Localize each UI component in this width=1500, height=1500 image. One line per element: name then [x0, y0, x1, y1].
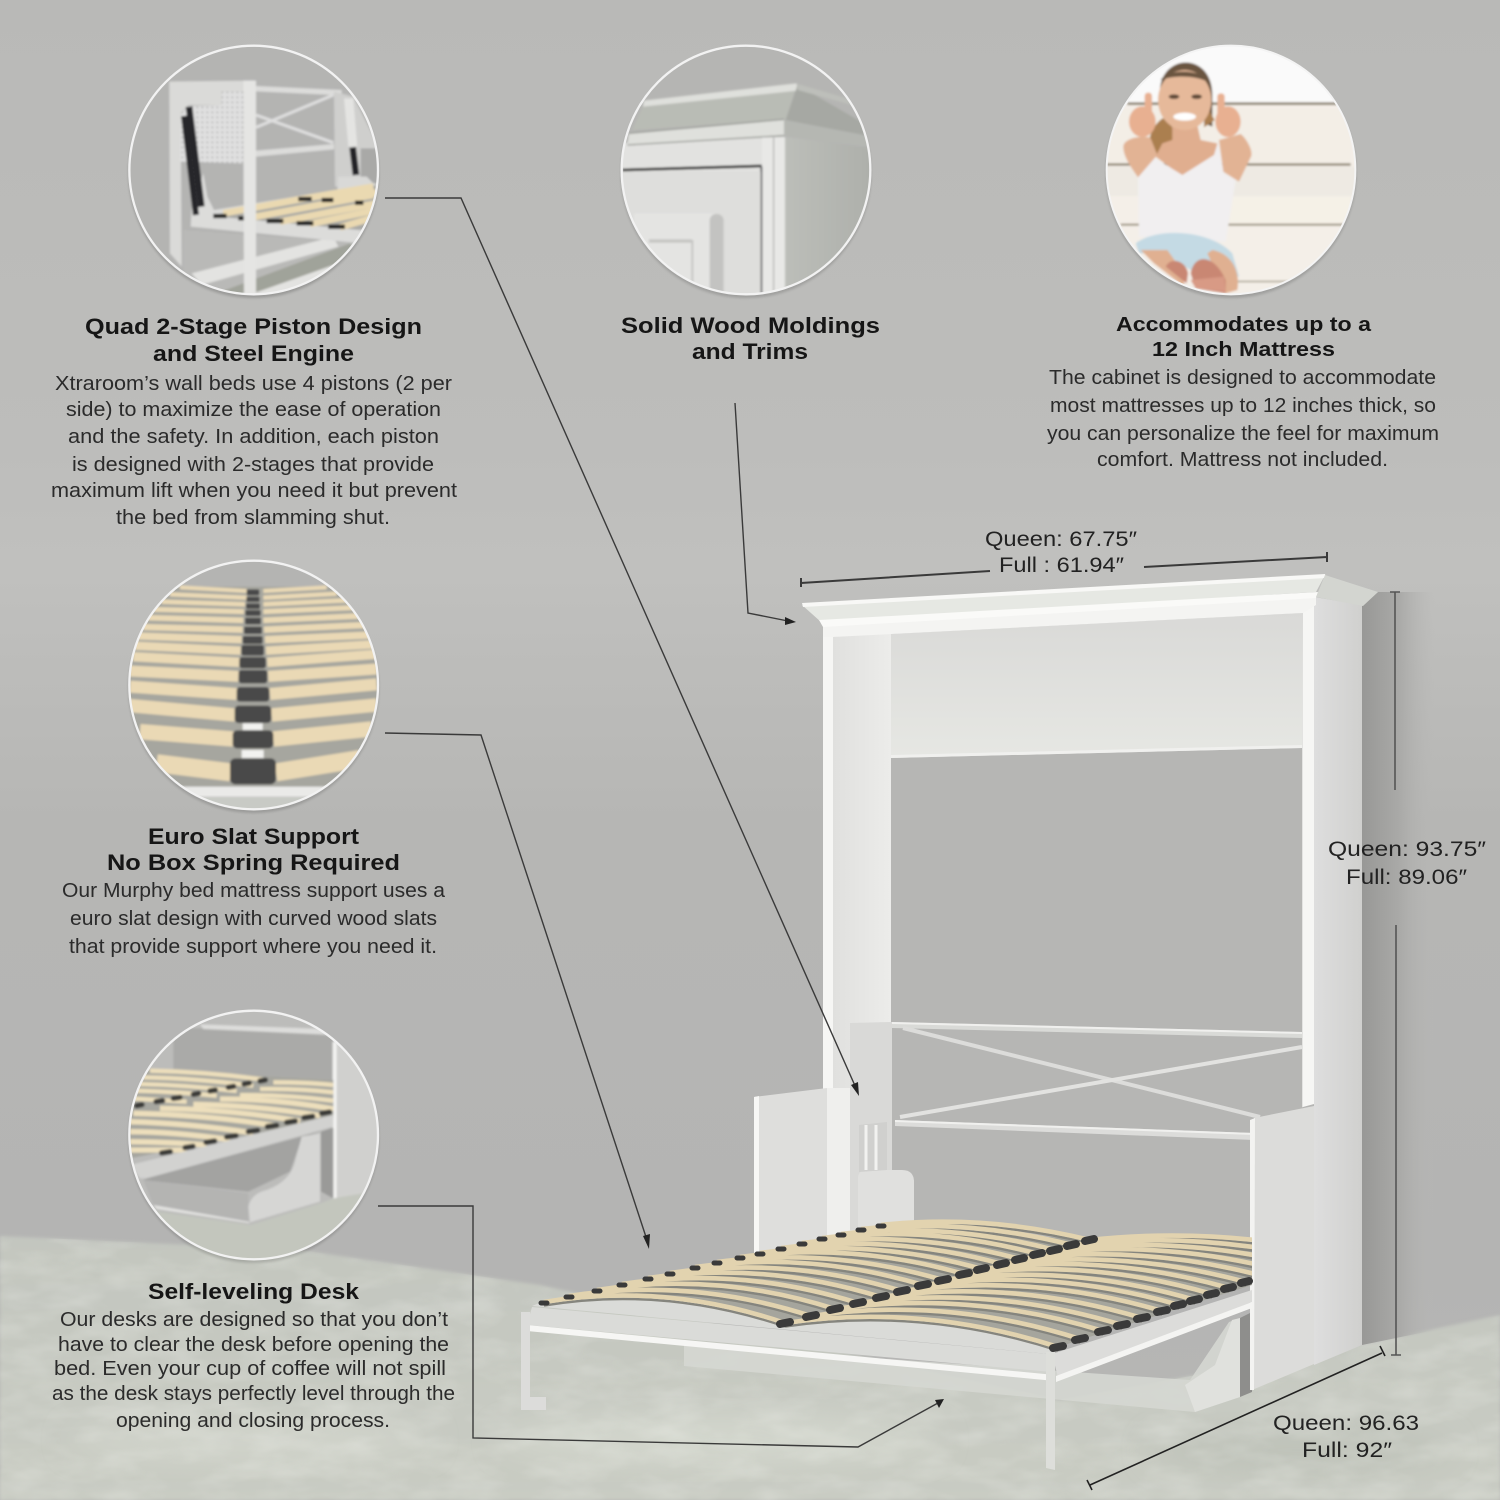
left wing panel [754, 1088, 850, 1255]
heading: mattress [1116, 314, 1372, 361]
text: desk description: Our desks are designed so that you don’t [60, 1308, 448, 1331]
dimension line: width [801, 552, 1327, 587]
text: piston description: and the safety. In addition, each piston [68, 425, 439, 448]
text: mattress description: you can personalize the feel for maximum [1047, 422, 1439, 445]
circle: self-leveling desk [128, 1010, 380, 1264]
leader: euro slat callout arrow [385, 733, 650, 1249]
heading: piston design: and Steel Engine [153, 341, 354, 366]
text: desk description: opening and closing process. [116, 1409, 390, 1432]
text: desk description: bed. Even your cup of coffee will not spill [54, 1357, 446, 1380]
desk under bed [684, 1312, 1252, 1412]
dimension label: width [985, 528, 1138, 577]
text: mattress description: comfort. Mattress not included. [1097, 448, 1388, 471]
text: mattress description [1047, 366, 1439, 471]
cabinet wall shadow [1362, 592, 1435, 1345]
text: desk description: have to clear the desk before opening the [58, 1333, 449, 1356]
heading: mattress: 12 Inch Mattress [1152, 339, 1335, 361]
heading: moldings: Solid Wood Moldings [621, 313, 880, 338]
text: piston description: the bed from slamming shut. [116, 506, 390, 529]
circle: woman with mattress [1105, 44, 1357, 298]
heading: desk: Self-leveling Desk [148, 1279, 360, 1304]
heading: piston design: Quad 2-Stage Piston Design [85, 314, 422, 339]
dimension label: depth: Queen: 96.63 [1273, 1412, 1419, 1435]
euro slats [544, 1222, 1331, 1350]
heading: moldings [621, 313, 880, 364]
text: desk description: as the desk stays perfectly level through the [52, 1382, 455, 1405]
circle: piston mechanism [128, 44, 380, 299]
leader: desk callout arrow [378, 1206, 944, 1447]
heading: mattress: Accommodates up to a [1116, 314, 1372, 336]
heading: piston design [85, 314, 422, 366]
dimension label: depth [1273, 1412, 1419, 1462]
murphy bed illustration [521, 574, 1378, 1470]
circle: euro slats [128, 560, 380, 814]
circle: crown molding [620, 44, 872, 298]
text: piston description: Xtraroom’s wall beds use 4 pistons (2 per [55, 372, 452, 395]
text: euro slat description: Our Murphy bed mattress support uses a [62, 879, 446, 902]
headboard frame with cross braces [850, 1022, 1302, 1230]
text: piston description [51, 372, 457, 529]
heading: euro slats: No Box Spring Required [107, 850, 400, 875]
dimension label: width: Queen: 67.75″ [985, 528, 1138, 551]
slat holders [541, 1226, 1249, 1348]
text: euro slat description [62, 879, 446, 958]
dimension line: height [1390, 592, 1401, 1355]
text: mattress description: The cabinet is designed to accommodate [1049, 366, 1436, 389]
text: desk description [52, 1308, 455, 1432]
heading: euro slats [107, 824, 400, 875]
text: mattress description: most mattresses up to 12 inches thick, so [1050, 394, 1436, 417]
bed legs [521, 1312, 1055, 1470]
dimension label: height: Queen: 93.75″ [1328, 838, 1487, 861]
text: piston description: maximum lift when you need it but prevent [51, 479, 457, 502]
leader: molding callout arrow [735, 403, 796, 625]
text: euro slat description: euro slat design with curved wood slats [70, 907, 437, 930]
open cabinet [802, 574, 1378, 1365]
text: piston description: side) to maximize the ease of operation [66, 398, 441, 421]
dimension label: height: Full: 89.06″ [1346, 866, 1468, 889]
floor [0, 1230, 1500, 1500]
dimension label: height [1328, 838, 1487, 889]
dimension line: depth [1087, 1346, 1385, 1490]
dimension label: depth: Full: 92″ [1302, 1439, 1393, 1462]
dimension label: width: Full : 61.94″ [999, 554, 1125, 577]
bed platform frame [527, 1225, 1252, 1382]
right pedestal [1250, 1106, 1314, 1390]
heading: euro slats: Euro Slat Support [148, 824, 360, 849]
text: euro slat description: that provide support where you need it. [69, 935, 437, 958]
heading: moldings: and Trims [692, 339, 808, 364]
text: piston description: is designed with 2-stages that provide [72, 453, 434, 476]
leader: piston callout arrow [385, 198, 859, 1096]
